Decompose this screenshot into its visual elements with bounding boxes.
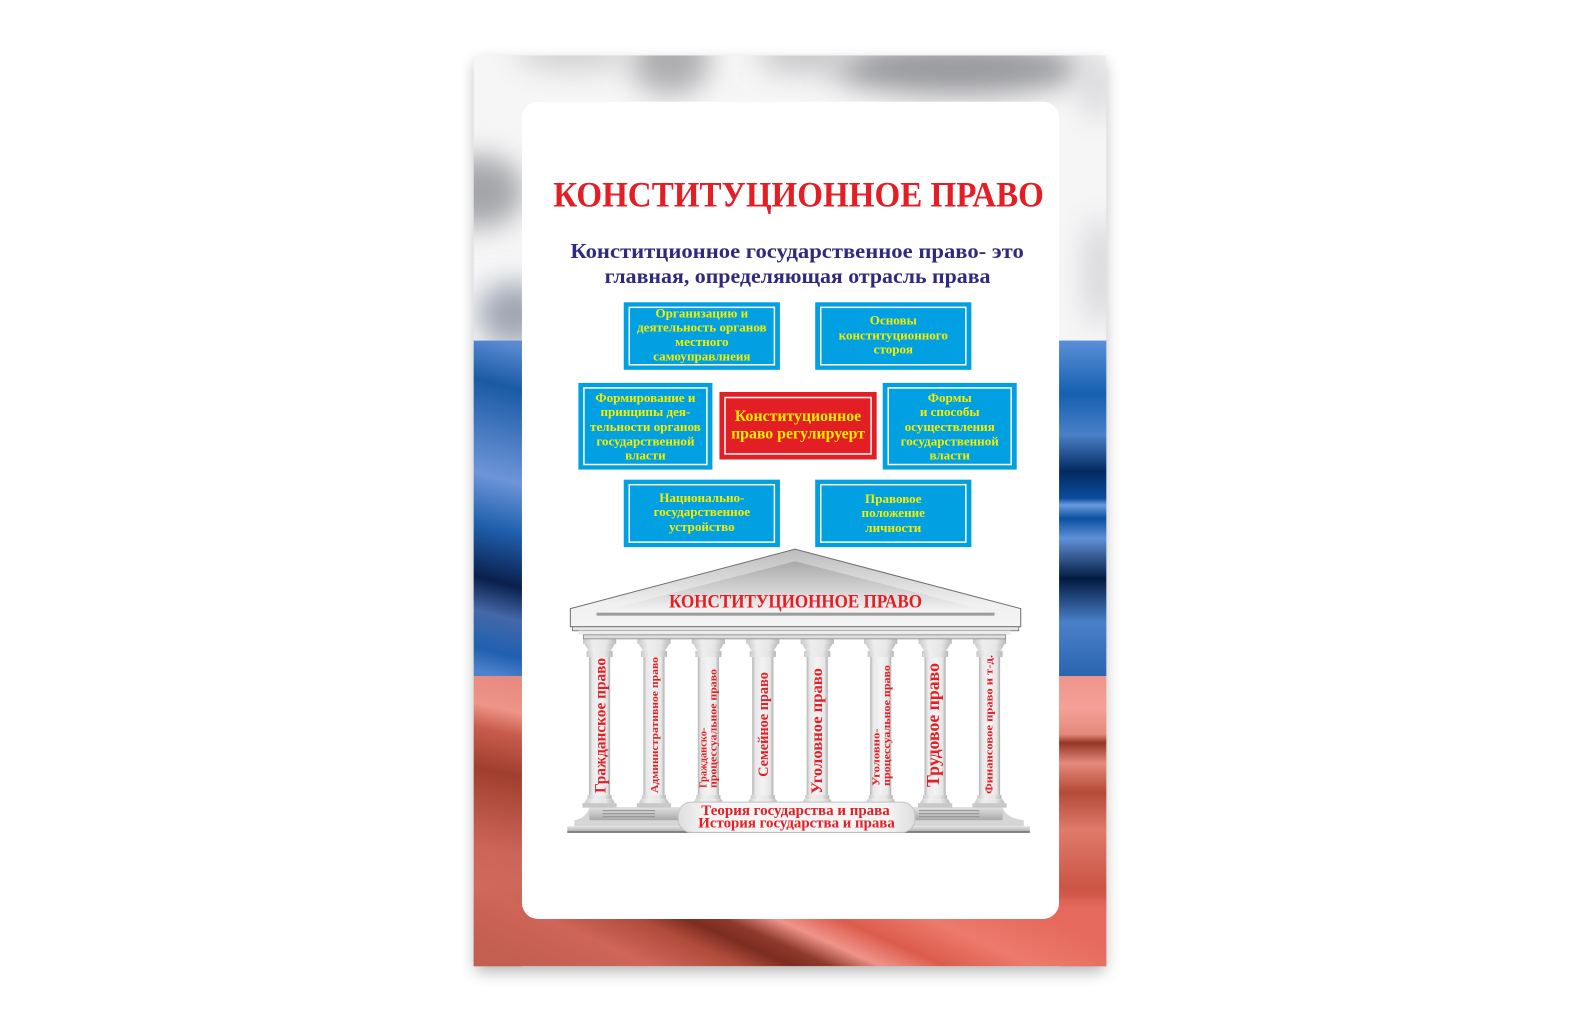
box: state bodies: государственной	[596, 433, 695, 448]
title: КОНСТИТУЦИОННОЕ ПРАВО	[553, 175, 1044, 215]
column label: civil law: Гражданское право	[593, 658, 610, 793]
box: local self-government: деятельность органов	[637, 320, 767, 335]
white content panel	[522, 102, 1059, 919]
box: forms of power	[883, 383, 1017, 470]
box: state bodies: принципы дея-	[600, 404, 690, 419]
box: forms of power: государственной	[901, 433, 999, 448]
box: national-state structure	[624, 480, 780, 547]
column label: civil procedure law: процессуальное право	[708, 669, 719, 788]
box: local self-government: самоуправлнеия	[653, 349, 751, 364]
box: constitutional foundations	[815, 302, 971, 370]
box: forms of power: Формы	[928, 390, 972, 405]
box: local self-government: местного	[675, 334, 729, 349]
column label: criminal procedure law: процессуальное право	[882, 665, 893, 786]
box: forms of power: и способы	[920, 404, 980, 419]
box: forms of power: власти	[929, 447, 970, 462]
poster shadow	[476, 62, 1104, 971]
central red box: Конституционное	[735, 408, 861, 425]
temple illustration	[567, 549, 1030, 833]
column label: financial law: Финансовое право и т-д.	[985, 655, 996, 794]
box: national-state structure: государственное	[654, 504, 750, 519]
box: national-state structure: Национально-	[659, 490, 744, 505]
column label: administrative law: Административное право	[650, 657, 661, 793]
box: constitutional foundations: Основы	[870, 312, 917, 327]
temple pediment label: КОНСТИТУЦИОННОЕ ПРАВО	[669, 592, 922, 613]
column label: criminal procedure law: Уголовно-	[872, 728, 883, 786]
box: state bodies: Формирование и	[595, 390, 696, 405]
box: state bodies: тельности органов	[590, 419, 701, 434]
box: state bodies: власти	[625, 447, 666, 462]
flag background	[474, 56, 1106, 966]
box: national-state structure: устройство	[669, 519, 735, 534]
foundation plaque: История государства и права	[698, 815, 895, 831]
column label: civil procedure law: Гражданско-	[698, 727, 709, 788]
box: legal status: положение	[862, 505, 925, 520]
column label: criminal law: Уголовное право	[809, 668, 826, 794]
temple steps	[567, 807, 1030, 833]
subtitle: Конститционное государственное право- это	[570, 239, 1024, 263]
subtitle: главная, определяющая отрасль права	[605, 264, 991, 288]
column label: civil procedure law	[698, 669, 719, 788]
foundation plaque	[678, 802, 915, 832]
box: local self-government: Организацию и	[655, 305, 749, 320]
column label: labour law: Трудовое право	[923, 663, 943, 787]
column label: criminal procedure law	[872, 665, 893, 786]
box: local self-government	[624, 302, 780, 370]
column label: family law: Семейное право	[756, 672, 772, 777]
temple pediment	[570, 549, 1021, 639]
temple columns	[582, 639, 1007, 808]
subtitle	[570, 239, 1024, 288]
foundation plaque: Теория государства и права	[701, 803, 890, 819]
box: constitutional foundations: конституционного	[839, 328, 948, 343]
central red box	[719, 392, 877, 459]
box: forms of power: осуществления	[905, 419, 995, 434]
box: constitutional foundations: стороя	[874, 342, 913, 357]
box: legal status: Правовое	[865, 491, 922, 506]
box: legal status: личности	[865, 520, 922, 535]
central red box: право регулируерт	[731, 425, 865, 442]
box: state bodies	[578, 383, 712, 470]
box: legal status	[815, 480, 971, 547]
